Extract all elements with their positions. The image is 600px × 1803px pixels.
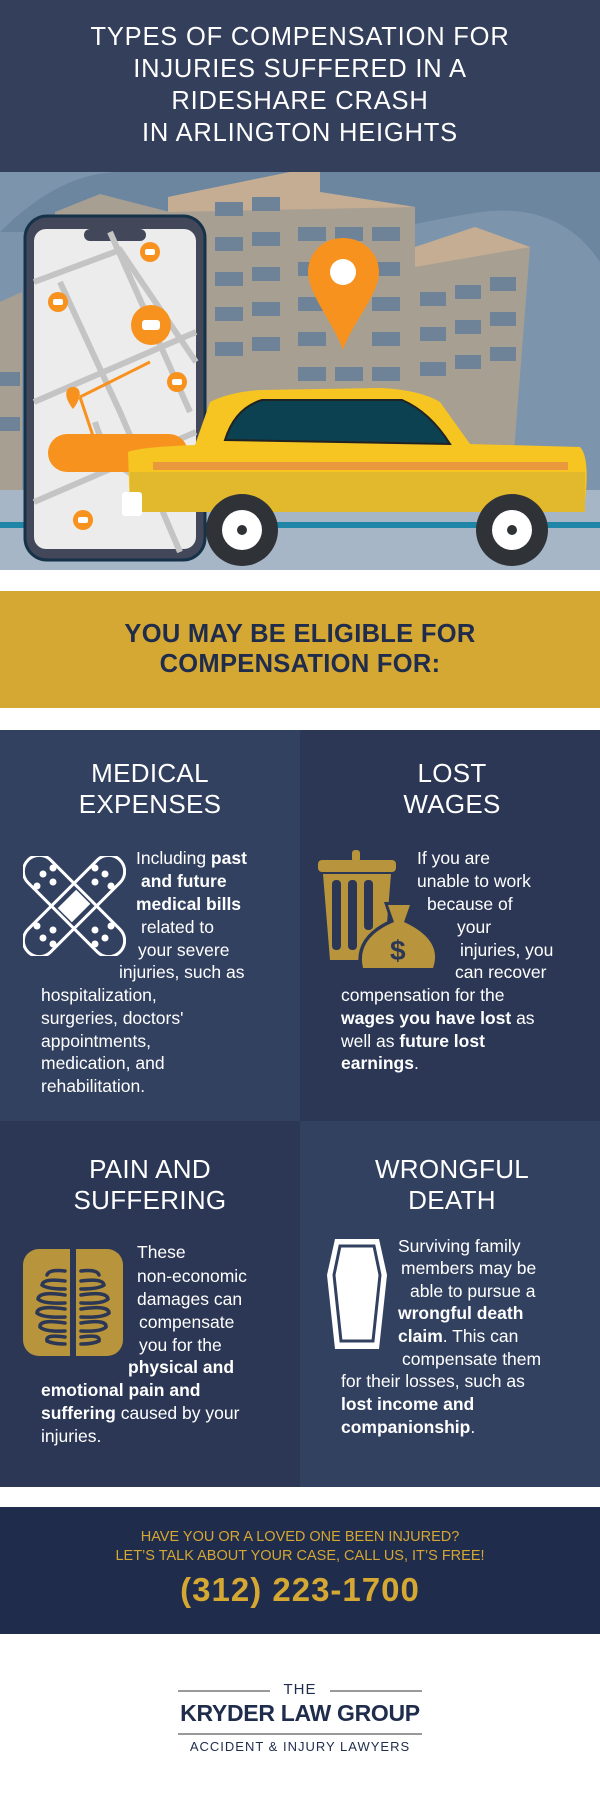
text: lost wages description: your (457, 917, 491, 937)
text: lost wages description: injuries, you (460, 940, 553, 960)
text: wrongful death description: wrongful death (398, 1303, 523, 1323)
text: medical expenses description: medication, and (41, 1053, 165, 1073)
text: pain and suffering description: emotional pain and (41, 1380, 200, 1400)
text: pain and suffering description: damages can (137, 1289, 242, 1309)
heading: pain and suffering: SUFFERING (74, 1185, 226, 1215)
icon: trash can and money bag: $ (390, 935, 406, 966)
text: medical expenses description: Including past (136, 848, 247, 868)
heading: wrongful death: WRONGFUL (375, 1154, 529, 1184)
call to action box (0, 1507, 600, 1634)
logo: the kryder law group: KRYDER LAW GROUP (180, 1700, 420, 1726)
heading: pain and suffering (74, 1154, 226, 1215)
icon: trash can and money bag (318, 850, 435, 968)
text: pain and suffering description (41, 1242, 247, 1446)
text: pain and suffering description: physical and (128, 1357, 234, 1377)
text: wrongful death description: compensate them (402, 1349, 541, 1369)
text: pain and suffering description: These (137, 1242, 186, 1262)
text: medical expenses description: related to (141, 917, 214, 937)
text: pain and suffering description: you for the (139, 1335, 222, 1355)
text: lost wages description: compensation for the (341, 985, 504, 1005)
header: title: TYPES OF COMPENSATION FOR (90, 23, 510, 51)
heading: medical expenses: EXPENSES (79, 789, 221, 819)
text: wrongful death description: Surviving family (398, 1236, 521, 1256)
phone number: (312) 223-1700 (180, 1571, 420, 1608)
logo: the kryder law group: ACCIDENT & INJURY LAWYERS (190, 1739, 410, 1754)
text: pain and suffering description: non-economic (137, 1266, 247, 1286)
text: medical expenses description: appointments, (41, 1031, 151, 1051)
cta text: HAVE YOU OR A LOVED ONE BEEN INJURED? (141, 1529, 459, 1545)
text: lost wages description: unable to work (417, 871, 531, 891)
header: title: INJURIES SUFFERED IN A (133, 55, 467, 83)
heading: wrongful death (375, 1154, 529, 1215)
header: title: RIDESHARE CRASH (171, 87, 429, 115)
icon: coffin (327, 1239, 387, 1349)
icon: map pin (308, 238, 379, 350)
text: wrongful death description (341, 1236, 541, 1437)
header: title: IN ARLINGTON HEIGHTS (142, 119, 458, 147)
logo: the kryder law group: THE (284, 1681, 316, 1698)
cta text (115, 1529, 485, 1564)
heading: lost wages (403, 758, 501, 819)
text: wrongful death description: claim. This can (398, 1326, 518, 1346)
panel: wrongful death (300, 1121, 600, 1487)
panel: pain and suffering (0, 1121, 300, 1487)
text: medical expenses description: medical bills (136, 894, 241, 914)
text: lost wages description: earnings. (341, 1053, 419, 1073)
text: lost wages description: can recover (455, 962, 546, 982)
heading: wrongful death: DEATH (408, 1185, 496, 1215)
taxi car (122, 388, 587, 566)
header: title (0, 0, 600, 172)
text: medical expenses description: surgeries, doctors' (41, 1008, 183, 1028)
text: medical expenses description: hospitalization, (41, 985, 157, 1005)
phone with map (25, 216, 205, 560)
buildings (0, 172, 530, 502)
gold banner heading: YOU MAY BE ELIGIBLE FOR (124, 620, 476, 648)
text: wrongful death description: lost income and (341, 1394, 474, 1414)
text: medical expenses description: rehabilitation. (41, 1076, 145, 1096)
heading: medical expenses (79, 758, 221, 819)
heading: lost wages: WAGES (403, 789, 501, 819)
text: medical expenses description: and future (141, 871, 227, 891)
text: lost wages description: because of (427, 894, 513, 914)
text: pain and suffering description: compensate (139, 1312, 234, 1332)
icon: bandages (23, 856, 126, 956)
text: wrongful death description: able to pursue a (410, 1281, 536, 1301)
heading: pain and suffering: PAIN AND (89, 1154, 211, 1184)
text: medical expenses description: injuries, such as (119, 962, 244, 982)
text: pain and suffering description: suffering caused by your (41, 1403, 239, 1423)
cta text: LET’S TALK ABOUT YOUR CASE, CALL US, IT’S FREE! (115, 1548, 485, 1564)
panel: medical expenses (0, 730, 300, 1121)
text: lost wages description: well as future lost (341, 1031, 485, 1051)
text: wrongful death description: companionship. (341, 1417, 475, 1437)
text: wrongful death description: for their losses, such as (341, 1371, 525, 1391)
text: medical expenses description: your severe (138, 940, 229, 960)
gold banner heading (0, 591, 600, 708)
illustration: city, phone and taxi (0, 172, 600, 570)
text: medical expenses description (41, 848, 247, 1096)
icon: ribcage x-ray (23, 1249, 123, 1356)
logo: the kryder law group (178, 1681, 422, 1754)
text: wrongful death description: members may be (401, 1258, 536, 1278)
heading: medical expenses: MEDICAL (91, 758, 209, 788)
text: lost wages description: If you are (417, 848, 490, 868)
text: pain and suffering description: injuries. (41, 1426, 101, 1446)
text: lost wages description: wages you have lost as (341, 1008, 535, 1028)
panel: lost wages (300, 730, 600, 1121)
gold banner heading: COMPENSATION FOR: (160, 650, 440, 678)
heading: lost wages: LOST (417, 758, 487, 788)
text: lost wages description (341, 848, 553, 1073)
